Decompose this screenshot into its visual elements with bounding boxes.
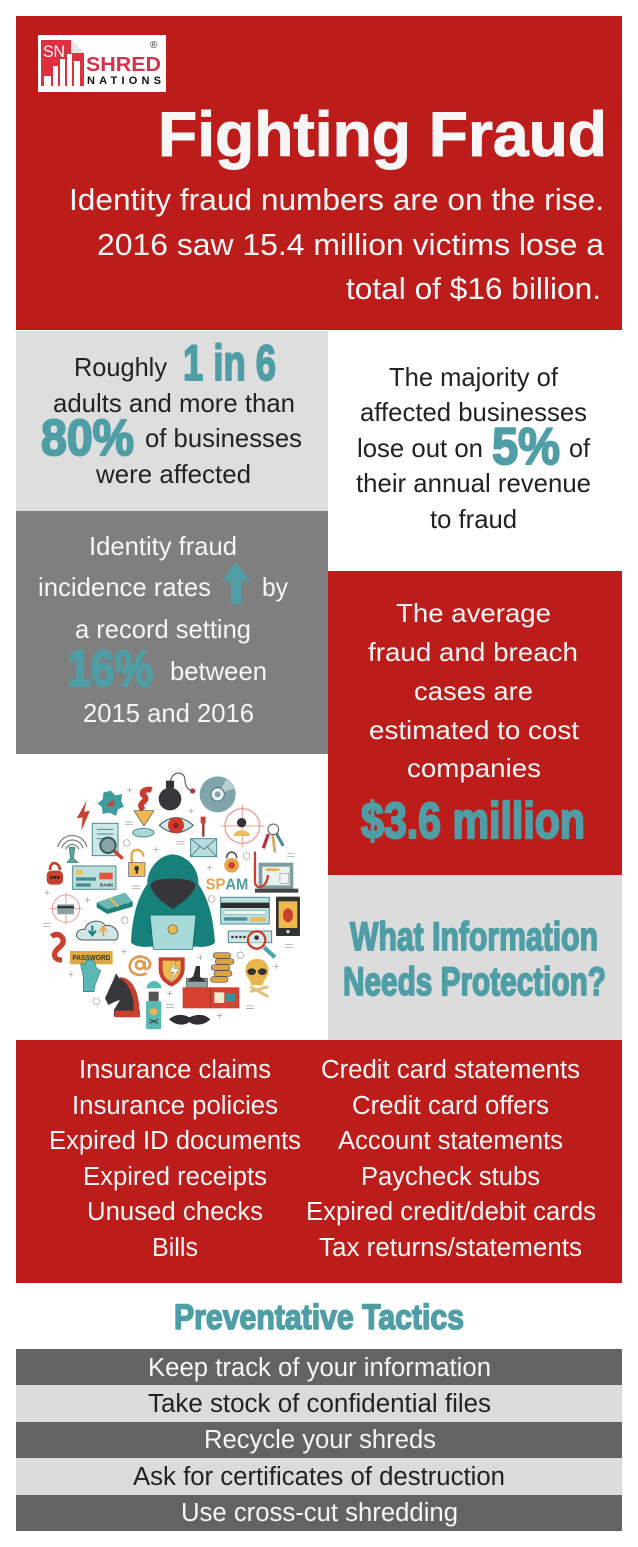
logo: ®	[150, 40, 158, 51]
icon: at sign	[130, 957, 150, 975]
list: right column: Expired credit/debit cards	[306, 1198, 596, 1226]
icon: targeted card	[50, 893, 82, 925]
intro text: Identity fraud numbers are on the rise.	[69, 182, 604, 217]
icon: disc	[200, 776, 236, 812]
icon: virus	[98, 791, 124, 816]
list: right column: Paycheck stubs	[361, 1163, 540, 1191]
icon: bomb	[159, 773, 195, 810]
icon: lightning	[77, 801, 90, 831]
icon: hooded hacker	[131, 854, 215, 949]
intro text	[69, 182, 605, 306]
panel: tactics list: Keep track of your information	[148, 1354, 491, 1382]
panel: incidence rates: incidence rates	[38, 572, 211, 602]
title: Fighting Fraud	[158, 100, 607, 170]
panel: tactics list: Ask for certificates of destruction	[133, 1463, 505, 1491]
panel: tactics list: Take stock of confidential files	[148, 1390, 491, 1418]
list: left column: Expired ID documents	[49, 1127, 301, 1155]
panel: 1 in 6 adults	[16, 331, 328, 511]
panel: 1 in 6 adults: 1 in 6	[183, 335, 276, 391]
panel: 1 in 6 adults: 80%	[41, 409, 134, 466]
panel: 5% of revenue: to fraud	[430, 504, 517, 534]
panel: 5% of revenue	[328, 331, 622, 571]
list: left column: Insurance claims	[79, 1056, 271, 1084]
icon: cloud transfer	[77, 921, 118, 940]
icon: spam label: SPAM	[206, 877, 248, 894]
icon: bank card: BANK	[100, 882, 114, 887]
icon: password hand: PASSWORD	[72, 955, 110, 962]
panel: 5% of revenue: their annual revenue	[356, 468, 591, 498]
icon: eye	[159, 817, 193, 833]
icon: red padlock	[47, 863, 63, 885]
panel: tactics list	[16, 1349, 622, 1531]
icon: wallet and hand	[183, 966, 239, 1008]
panel: 1 in 6 adults: Roughly	[74, 352, 167, 382]
icon: targeted person	[221, 805, 264, 847]
panel: average cost: The average	[396, 598, 551, 628]
logo: NATIONS	[87, 75, 161, 87]
icon: credit card	[221, 897, 269, 924]
panel: 5% of revenue: lose out on	[357, 433, 483, 463]
panel: incidence rates: Identity fraud	[89, 531, 237, 561]
icon: phishing envelope	[191, 817, 217, 857]
panel: 1 in 6 adults: were affected	[95, 459, 251, 489]
icon: worm and arrow	[133, 790, 154, 837]
icon: cash stack	[97, 893, 133, 914]
list: left column: Unused checks	[87, 1198, 263, 1226]
list: left column: Bills	[152, 1234, 198, 1262]
icon: document and magnifier	[92, 823, 123, 859]
icon: bank card	[73, 866, 116, 889]
icon: coin stack	[211, 953, 234, 982]
panel: incidence rates: a record setting	[75, 614, 251, 644]
panel: average cost: $3.6 million	[361, 792, 585, 849]
panel: average cost	[328, 571, 622, 875]
panel: average cost: estimated to cost	[369, 715, 580, 745]
icon: password field and magnifier	[228, 931, 275, 957]
panel: average cost: fraud and breach	[368, 637, 578, 667]
icon: password hand	[70, 951, 113, 992]
panel: what information heading	[328, 875, 622, 1040]
panel: tactics list: Recycle your shreds	[204, 1426, 436, 1454]
panel: incidence rates: between	[170, 656, 267, 686]
intro text: total of $16 billion.	[346, 271, 601, 306]
list: right column: Account statements	[338, 1127, 563, 1155]
panel: average cost: cases are	[414, 676, 533, 706]
panel: incidence rates	[16, 511, 328, 754]
icon: shield	[159, 957, 185, 987]
icon: snake	[52, 934, 63, 960]
illustration: hacker and cyber icons	[43, 773, 300, 1029]
logo: SN	[43, 42, 65, 61]
arrow: up	[222, 562, 250, 604]
list: left column	[49, 1056, 301, 1262]
icon: usb drive	[146, 981, 161, 1029]
list: left column: Expired receipts	[83, 1163, 267, 1191]
icon: trojan horse	[105, 973, 140, 1017]
decorative marks	[43, 787, 295, 1018]
icon: keys	[263, 824, 283, 853]
icon: orange padlock	[224, 852, 239, 873]
icon: wifi tower	[58, 835, 87, 862]
icon: hook and laptop	[255, 852, 298, 893]
panel: 5% of revenue: affected businesses	[360, 397, 587, 427]
icon: phone with bug	[276, 897, 300, 936]
logo: SHRED	[86, 54, 161, 76]
panel: 5% of revenue: The majority of	[389, 362, 559, 392]
intro text: 2016 saw 15.4 million victims lose a	[97, 227, 605, 262]
list: right column: Credit card statements	[321, 1056, 580, 1084]
icon: open padlock	[129, 850, 145, 876]
panel: 5% of revenue: 5%	[492, 418, 560, 476]
list: left column: Insurance policies	[72, 1092, 278, 1120]
list: right column: Tax returns/statements	[319, 1234, 582, 1262]
icon: skull and bones	[245, 959, 269, 997]
panel: incidence rates: 2015 and 2016	[83, 698, 254, 728]
panel: information list	[16, 1040, 622, 1283]
list: right column: Credit card offers	[352, 1092, 549, 1120]
panel: 5% of revenue: of	[569, 433, 591, 463]
logo	[38, 35, 166, 92]
icon: mask	[169, 1015, 210, 1025]
panel: 1 in 6 adults: of businesses	[145, 423, 302, 453]
panel: average cost: companies	[407, 753, 541, 783]
panel: header	[16, 16, 622, 330]
heading: preventative tactics: Preventative Tactics	[174, 1298, 464, 1337]
panel: tactics list: Use cross-cut shredding	[181, 1499, 458, 1527]
panel: incidence rates: 16%	[67, 640, 153, 697]
panel: incidence rates: by	[262, 572, 288, 602]
list: right column	[306, 1056, 596, 1262]
panel: 1 in 6 adults: adults and more than	[53, 388, 295, 418]
